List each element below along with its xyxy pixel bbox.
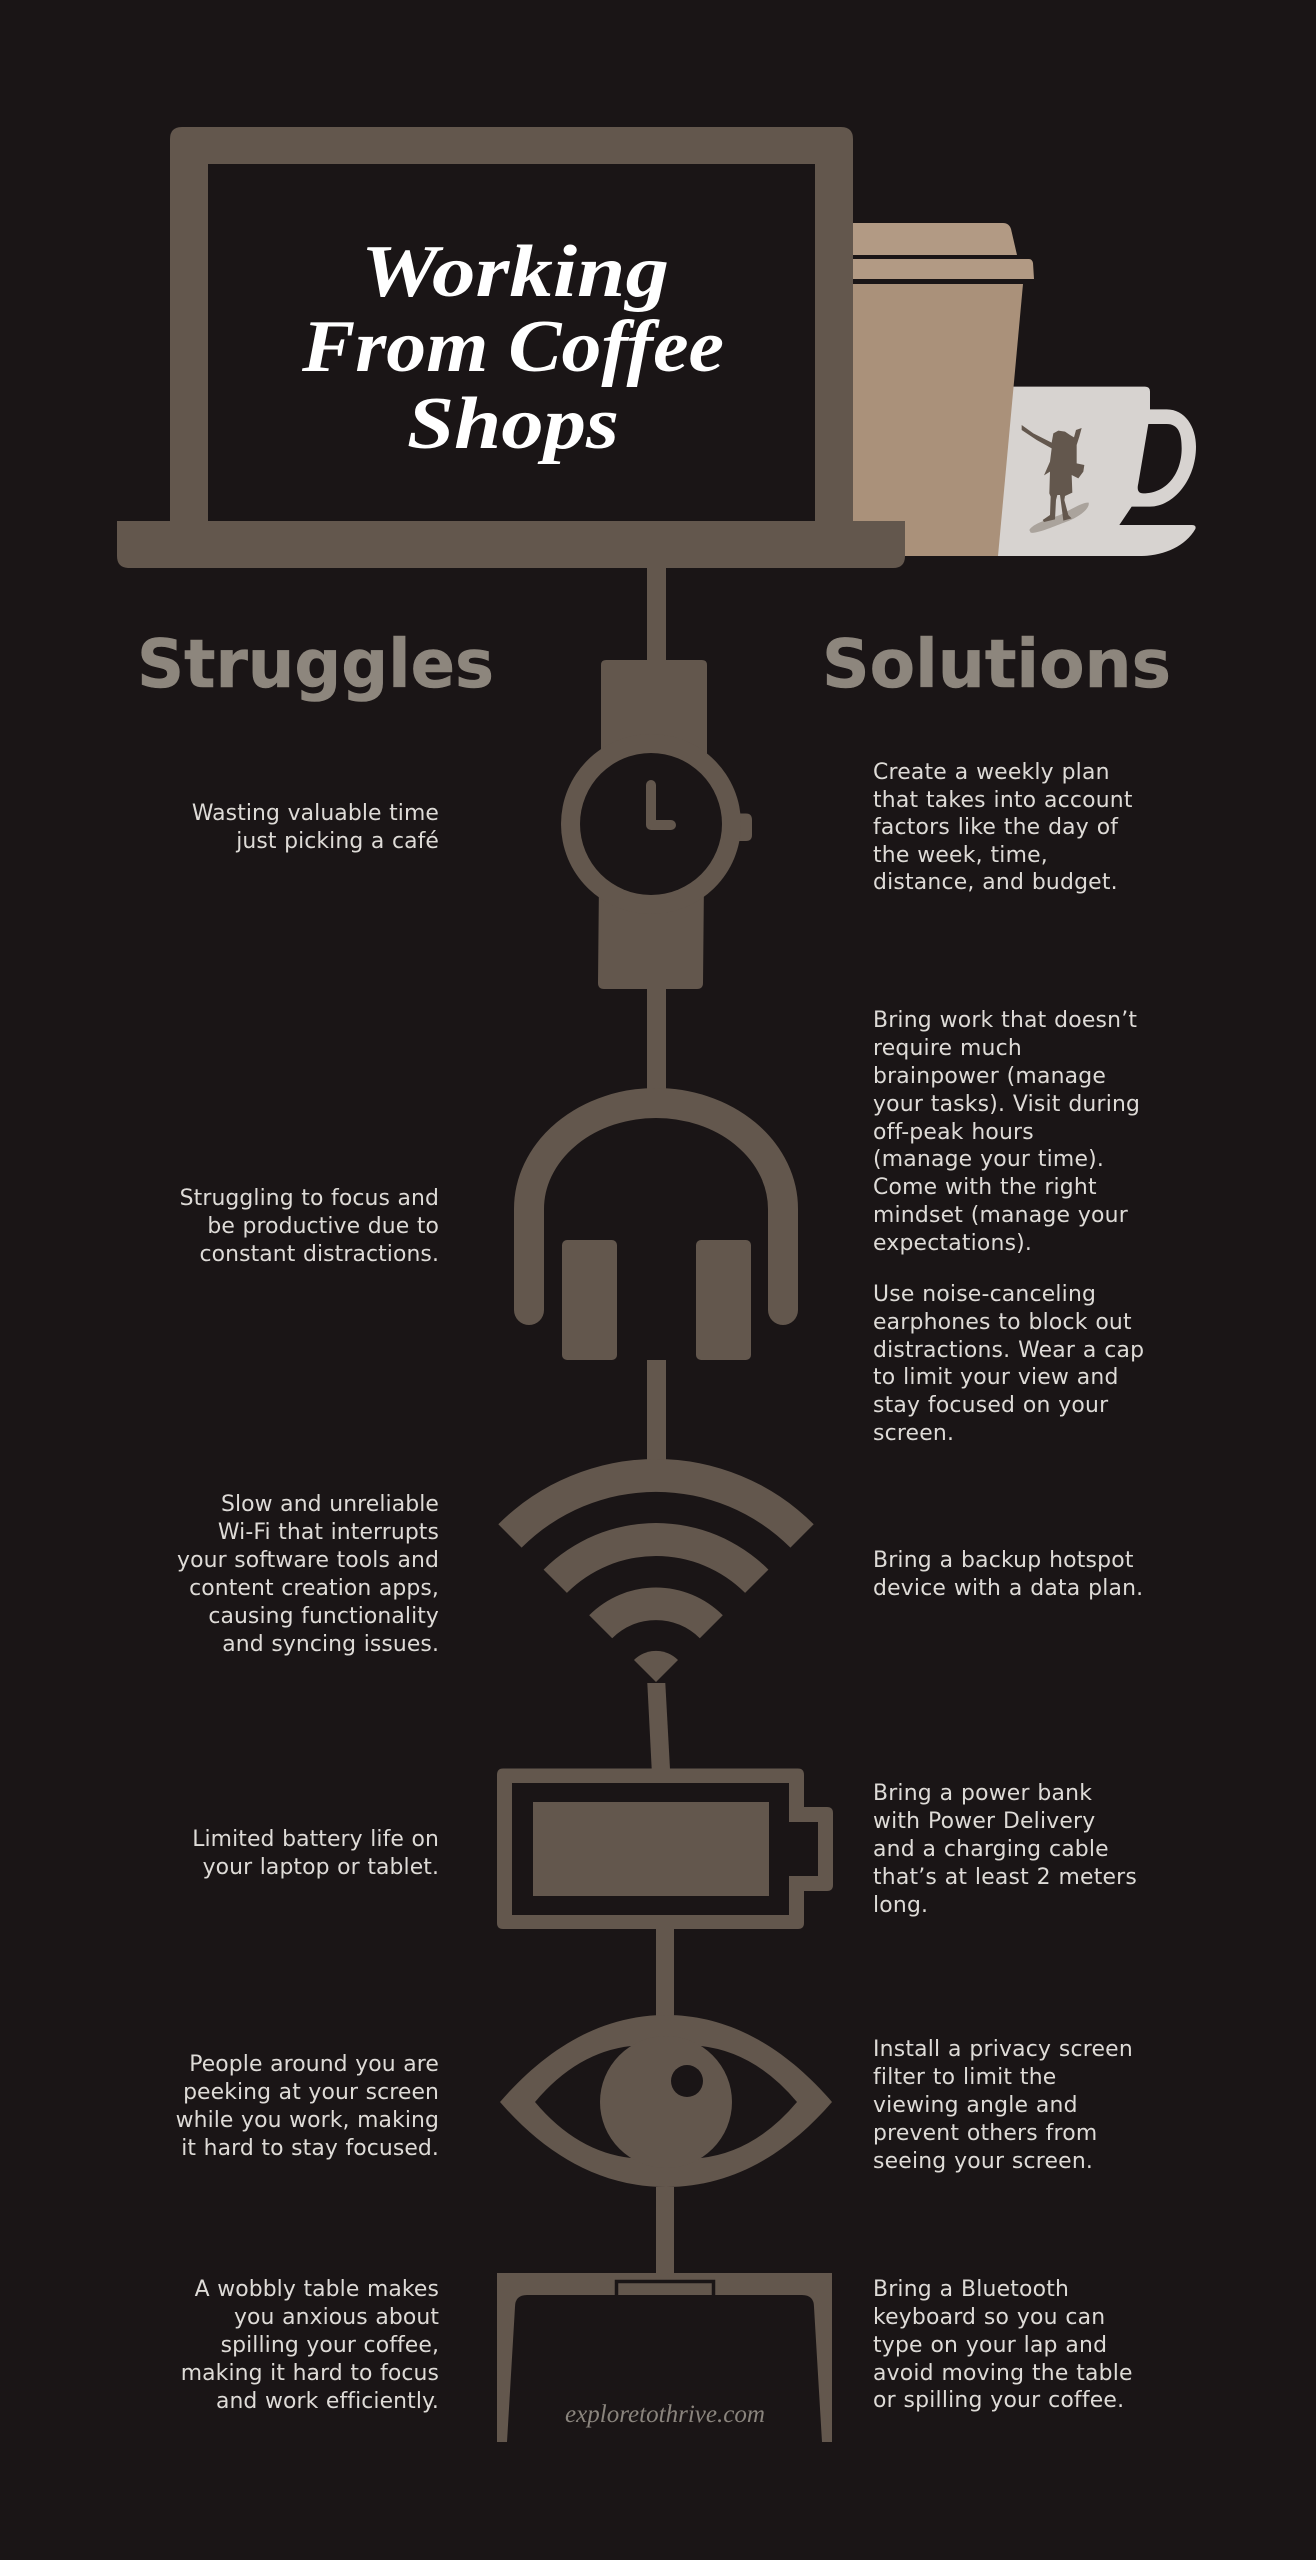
struggle: distractions: constant distractions. (199, 1242, 439, 1267)
struggle: battery life: Limited battery life on (192, 1827, 439, 1852)
solution: weekly plan: the week, time, (873, 843, 1048, 868)
connector: watch to headphones (647, 989, 666, 1089)
solution: noise-canceling earphones: earphones to block out (873, 1310, 1132, 1335)
struggle: battery life: your laptop or tablet. (203, 1855, 439, 1880)
solution: power bank: that’s at least 2 meters (873, 1865, 1137, 1890)
icon: battery (497, 1768, 833, 1929)
solution: noise-canceling earphones: distractions. Wear a cap (873, 1338, 1144, 1363)
struggle: wobbly table: you anxious about (234, 2305, 439, 2330)
title: From Coffee (301, 306, 724, 388)
solution: backup hotspot: device with a data plan. (873, 1576, 1143, 1601)
struggle: people peeking: it hard to stay focused. (181, 2136, 439, 2161)
icon: wifi signal (498, 1459, 814, 1682)
icon: eye (500, 2015, 832, 2187)
struggle: wobbly table: and work efficiently. (216, 2389, 439, 2414)
connector: laptop to watch (647, 568, 666, 660)
icon: laptop (117, 127, 905, 568)
struggle: wobbly table: making it hard to focus (181, 2361, 439, 2386)
icon: headphones (529, 1103, 783, 1360)
solution: privacy filter: viewing angle and (873, 2093, 1078, 2118)
struggle: distractions: Struggling to focus and (180, 1186, 439, 1211)
struggle: people peeking: People around you are (189, 2052, 439, 2077)
solution: manage tasks, time and expectations: your tasks). Visit during (873, 1092, 1140, 1117)
solution: noise-canceling earphones: to limit your view and (873, 1365, 1119, 1390)
struggle: people peeking: while you work, making (176, 2108, 439, 2133)
icon: hiker silhouette on mug (1022, 425, 1089, 533)
title: Shops (407, 383, 619, 465)
connector: battery to eye (656, 1929, 674, 2016)
struggle: picking a cafe: just picking a café (235, 829, 439, 854)
solution: privacy filter (873, 2037, 1133, 2174)
solution: power bank: and a charging cable (873, 1837, 1109, 1862)
solution: manage tasks, time and expectations: require much (873, 1036, 1022, 1061)
solution: manage tasks, time and expectations: mindset (manage your (873, 1203, 1128, 1228)
struggle: picking a cafe (192, 801, 439, 854)
struggle: distractions (180, 1186, 439, 1267)
icon: takeaway coffee cup (853, 223, 1034, 556)
title (301, 231, 724, 465)
struggle: people peeking: peeking at your screen (183, 2080, 439, 2105)
solution: noise-canceling earphones: Use noise-canceling (873, 1282, 1096, 1307)
solution: power bank: with Power Delivery (873, 1809, 1095, 1834)
solution: manage tasks, time and expectations: Bring work that doesn’t (873, 1008, 1137, 1033)
struggle: slow wifi: Slow and unreliable (221, 1492, 439, 1517)
solution: power bank: long. (873, 1893, 928, 1918)
website credit: exploretothrive.com (565, 2401, 765, 2428)
solution: bluetooth keyboard: or spilling your coffee. (873, 2388, 1124, 2413)
solution: bluetooth keyboard: keyboard so you can (873, 2305, 1105, 2330)
solution: manage tasks, time and expectations (873, 1008, 1140, 1256)
solution: backup hotspot (873, 1548, 1143, 1601)
struggle: picking a cafe: Wasting valuable time (192, 801, 439, 826)
solution: manage tasks, time and expectations: (manage your time). (873, 1147, 1104, 1172)
struggle: slow wifi: and syncing issues. (222, 1632, 439, 1657)
solution: weekly plan: that takes into account (873, 788, 1133, 813)
connector: headphones to wifi (647, 1360, 666, 1460)
solution: noise-canceling earphones: stay focused on your (873, 1393, 1108, 1418)
solution: backup hotspot: Bring a backup hotspot (873, 1548, 1134, 1573)
struggle: slow wifi: your software tools and (177, 1548, 439, 1573)
struggle: distractions: be productive due to (207, 1214, 439, 1239)
solution: bluetooth keyboard: avoid moving the table (873, 2361, 1133, 2386)
solution: privacy filter: seeing your screen. (873, 2149, 1093, 2174)
icon: wristwatch (561, 660, 752, 989)
solution: bluetooth keyboard: type on your lap and (873, 2333, 1107, 2358)
struggle: battery life (192, 1827, 439, 1880)
solution: bluetooth keyboard (873, 2277, 1133, 2413)
heading: solutions: Solutions (822, 625, 1171, 703)
struggle: slow wifi: Wi-Fi that interrupts (218, 1520, 439, 1545)
icon: espresso mug with saucer (993, 387, 1196, 556)
struggle: wobbly table: A wobbly table makes (195, 2277, 439, 2302)
solution: privacy filter: Install a privacy screen (873, 2037, 1133, 2062)
struggle: slow wifi (177, 1492, 439, 1657)
struggle: slow wifi: causing functionality (208, 1604, 439, 1629)
solution: manage tasks, time and expectations: brainpower (manage (873, 1064, 1106, 1089)
icon: wobbly table (497, 2273, 832, 2442)
solution: privacy filter: prevent others from (873, 2121, 1097, 2146)
connector: eye to table (656, 2187, 674, 2274)
struggle: wobbly table: spilling your coffee, (221, 2333, 439, 2358)
solution: power bank: Bring a power bank (873, 1781, 1092, 1806)
solution: weekly plan: Create a weekly plan (873, 760, 1110, 785)
solution: bluetooth keyboard: Bring a Bluetooth (873, 2277, 1069, 2302)
connector: wifi to battery (647, 1683, 670, 1769)
solution: noise-canceling earphones (873, 1282, 1144, 1446)
struggle: wobbly table (181, 2277, 439, 2414)
solution: manage tasks, time and expectations: off-peak hours (873, 1120, 1034, 1145)
solution: manage tasks, time and expectations: expectations). (873, 1231, 1032, 1256)
solution: weekly plan: factors like the day of (873, 815, 1119, 840)
struggle: slow wifi: content creation apps, (189, 1576, 439, 1601)
title: Working (361, 231, 669, 313)
solution: weekly plan: distance, and budget. (873, 870, 1118, 895)
solution: noise-canceling earphones: screen. (873, 1421, 954, 1446)
solution: manage tasks, time and expectations: Come with the right (873, 1175, 1097, 1200)
heading: struggles: Struggles (137, 625, 494, 703)
solution: weekly plan (873, 760, 1133, 895)
solution: power bank (873, 1781, 1137, 1918)
solution: privacy filter: filter to limit the (873, 2065, 1056, 2090)
struggle: people peeking (176, 2052, 439, 2161)
